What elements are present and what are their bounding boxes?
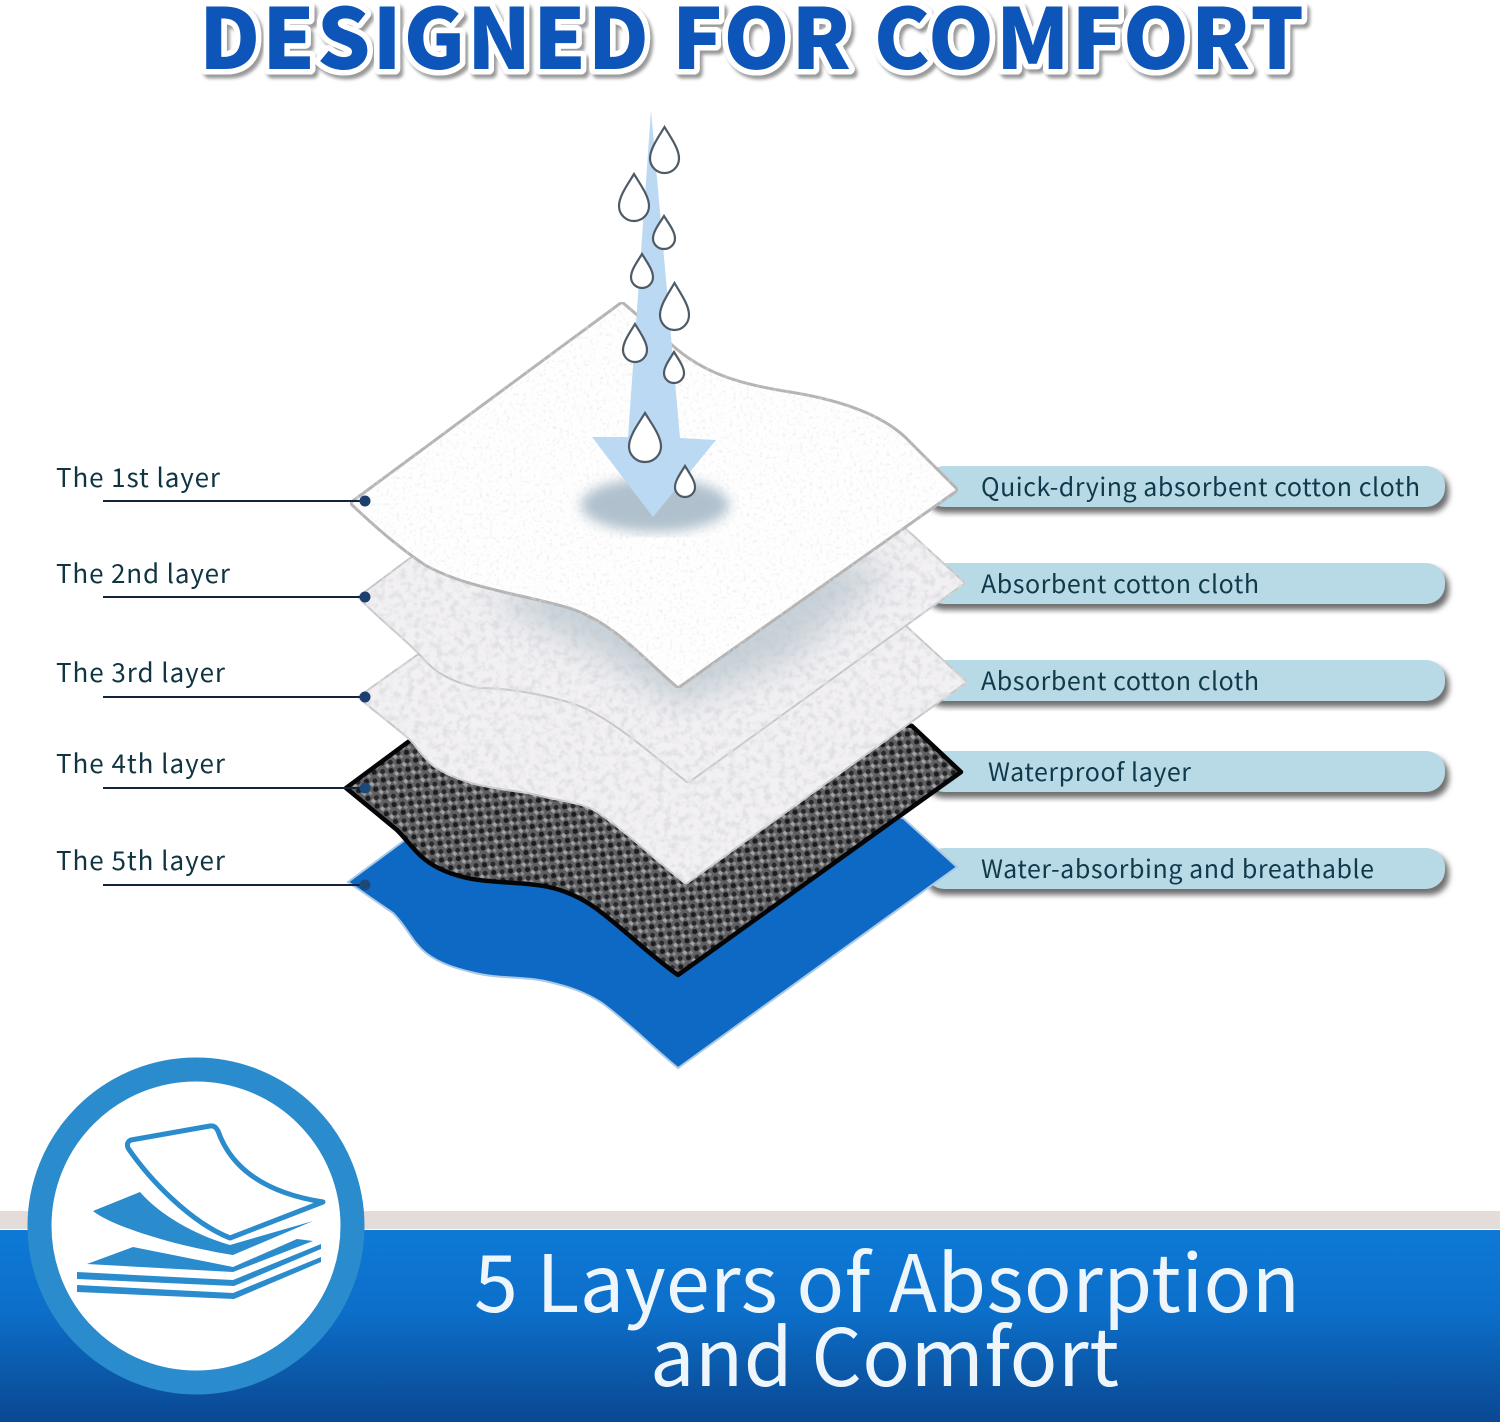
- banner heading: 5 Layers of Absorption: [474, 1220, 1300, 1335]
- pill: quick-drying: [925, 466, 1449, 513]
- label: 2nd layer: The 2nd layer: [56, 554, 231, 591]
- shadow under top layer: [490, 540, 890, 705]
- pill: absorbent cotton 1: Absorbent cotton cloth: [981, 565, 1259, 601]
- label: 1st layer: [56, 458, 370, 506]
- fabric layer 5: blue: [348, 760, 957, 1068]
- right label pills: [925, 466, 1449, 895]
- label: 1st layer: The 1st layer: [56, 458, 221, 495]
- pill: absorbent cotton 2: Absorbent cotton cloth: [981, 662, 1259, 698]
- pill: quick-drying: Quick-drying absorbent cotton cloth: [981, 468, 1420, 504]
- bottom banner: [0, 1211, 1500, 1422]
- pill: absorbent cotton 1: [925, 563, 1449, 610]
- pill: breathable: [925, 848, 1449, 895]
- fabric layer 3: white cotton: [358, 620, 967, 884]
- fabric layer 4: dark waterproof: [346, 660, 961, 975]
- label: 4th layer: The 4th layer: [56, 744, 226, 781]
- label: 4th layer: [56, 744, 370, 794]
- arrow: downward absorption: [592, 110, 716, 517]
- wet spot: [581, 478, 729, 532]
- water drops: [619, 127, 695, 497]
- label: 2nd layer: [56, 554, 370, 602]
- fabric layer 1: quick-drying top: [350, 302, 958, 688]
- label: 3rd layer: [56, 653, 370, 702]
- banner heading: and Comfort: [650, 1294, 1119, 1409]
- pill: waterproof: [925, 751, 1449, 798]
- fabric layer 2: white cotton: [358, 500, 965, 783]
- label: 5th layer: The 5th layer: [56, 841, 226, 878]
- label: 5th layer: [56, 841, 370, 890]
- pill: absorbent cotton 2: [925, 660, 1449, 707]
- label: 3rd layer: The 3rd layer: [56, 653, 226, 690]
- icon: stacked layers in circle: [40, 1070, 352, 1382]
- left layer labels: [56, 458, 370, 890]
- banner heading: [474, 1220, 1300, 1409]
- pill: waterproof: Waterproof layer: [988, 753, 1191, 789]
- pill: breathable: Water-absorbing and breathable: [981, 850, 1374, 886]
